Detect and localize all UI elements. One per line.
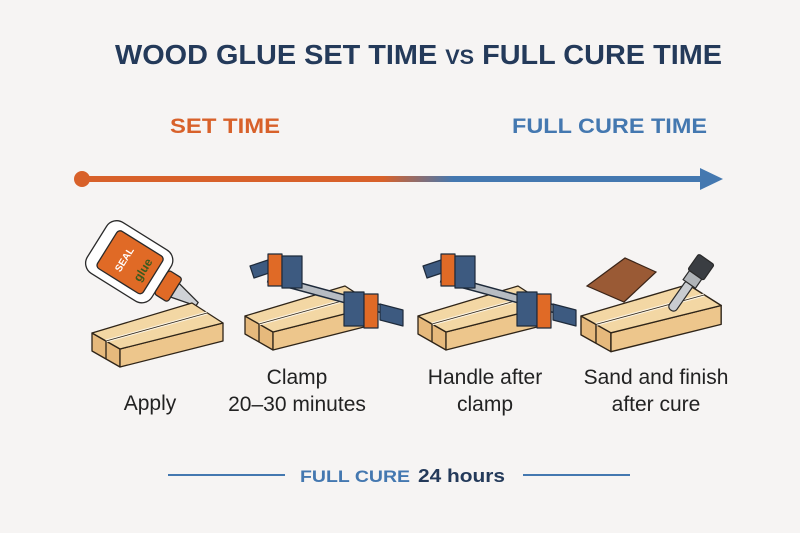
title: WOOD GLUE SET TIME VS FULL CURE TIME bbox=[115, 39, 722, 70]
icon: clamped boards bbox=[245, 254, 403, 350]
icon: clamped boards bbox=[418, 254, 576, 350]
text: sand and finish: Sand and finish bbox=[584, 366, 728, 389]
text: handle after clamp: Handle after bbox=[428, 366, 542, 389]
label: set time: SET TIME bbox=[170, 115, 280, 138]
step 3: handle bbox=[418, 254, 576, 416]
text: clamp: Clamp bbox=[267, 366, 327, 389]
step 1: apply bbox=[81, 216, 223, 415]
icon: board, sandpaper, brush bbox=[581, 254, 721, 352]
label: full cure time: FULL CURE TIME bbox=[512, 115, 707, 138]
footer: full cure 24 hours: 24 hours bbox=[418, 466, 505, 486]
footer: full cure 24 hours: FULL CURE bbox=[300, 467, 410, 486]
step 3: handle: clamp bbox=[457, 393, 513, 416]
step 2: clamp bbox=[228, 254, 403, 416]
timeline arrow bbox=[74, 168, 723, 190]
step 4: sand and finish: after cure bbox=[612, 393, 700, 416]
footer: full cure 24 hours bbox=[168, 466, 630, 486]
step 2: clamp: 20–30 minutes bbox=[228, 393, 366, 416]
text: apply: Apply bbox=[124, 392, 177, 415]
icon: glue bottle bbox=[81, 216, 213, 330]
step 4: sand and finish bbox=[581, 254, 728, 416]
icon: glue bottle: glue bbox=[130, 256, 156, 284]
icon: glue bottle: SEAL bbox=[113, 246, 137, 274]
icon: boards bbox=[92, 303, 223, 367]
